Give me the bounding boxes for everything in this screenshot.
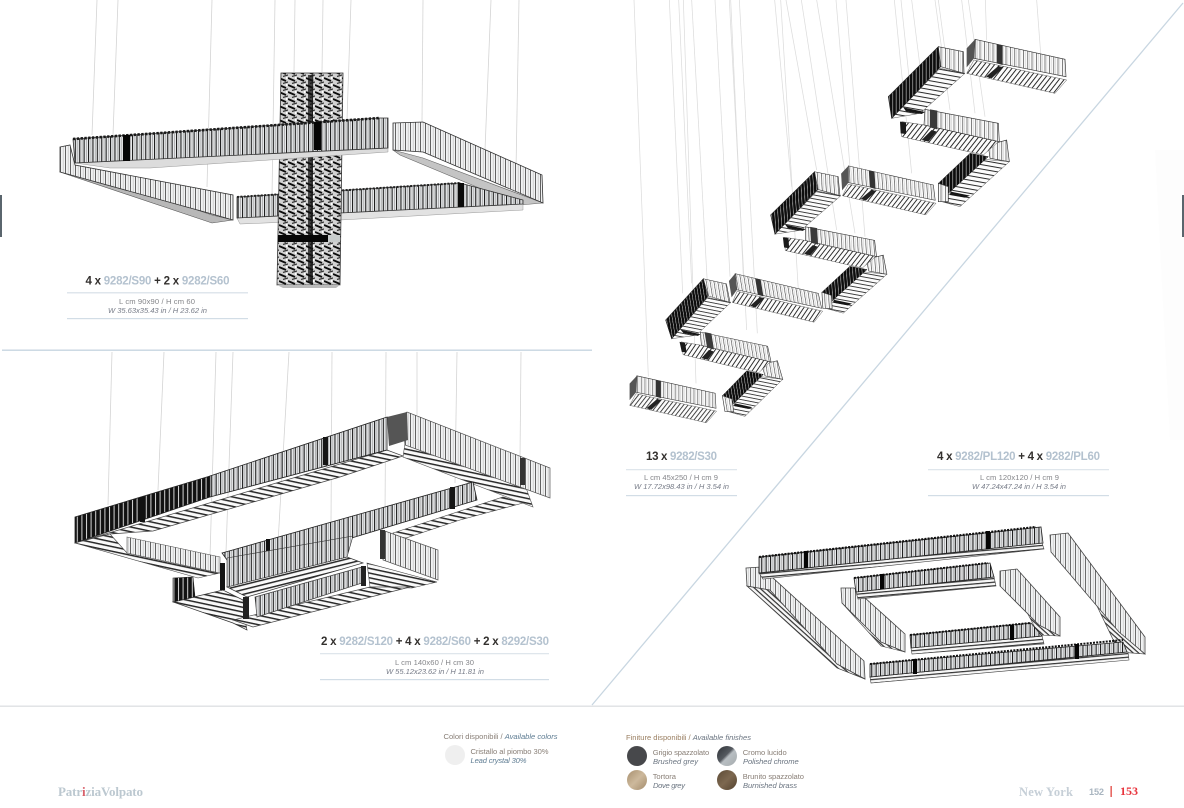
label: burnished brass: Burnished brass [743,781,797,790]
label: dove grey: Tortora [653,772,677,781]
caption: 4 x S90 + 2 x S60 [67,276,248,319]
right bar [393,122,543,205]
back bar [73,118,388,168]
model codes: 4 x 9282/S90 + 2 x 9282/S60 [86,276,230,288]
upper rectangle: right bar [387,412,550,507]
page number left: 152 [1089,787,1104,797]
footer rule [0,706,1184,707]
outer top bar [759,527,1044,579]
ceiling lamp: 4 x PL120 + 4 x PL60 [746,527,1145,683]
inner right bar [1000,569,1060,636]
caption: 2 x S120 + 4 x S60 + 2 x S30 [320,636,549,680]
page number separator [1110,786,1112,797]
middle group of bars [768,164,943,315]
left page mark [0,195,2,237]
upper rectangle: back bar [75,417,403,543]
label: lead crystal: Cristallo al piombo 30% [470,747,549,756]
model codes: 2 x 9282/S120 + 4 x 9282/S60 + 2 x 8292/S30 [321,636,549,648]
caption: 4 x PL120 + 4 x PL60 [928,451,1109,496]
left bar [60,145,233,223]
dimensions in inches: W 17.72x98.43 in / H 3.54 in [634,482,729,491]
label: brushed grey: Brushed grey [653,757,699,766]
swatch: polished chrome [717,746,737,766]
dimensions in cm: L cm 45x250 / H cm 9 [644,473,718,482]
lower rectangle [173,530,438,630]
caption: 13 x S30 [626,451,737,496]
dimensions in inches: W 35.63x35.43 in / H 23.62 in [108,306,207,315]
label: burnished brass [743,772,804,790]
diagonal divider [592,3,1183,705]
page number right: 153 [1120,784,1138,798]
inner left bar [841,588,905,652]
dimensions in cm: L cm 140x60 / H cm 30 [395,658,474,667]
suspension wires [92,0,519,197]
suspension wires [634,0,1041,383]
model codes: 13 x 9282/S30 [646,451,717,463]
legend heading: Colori disponibili / Available colors [444,732,558,741]
dimensions in cm: L cm 90x90 / H cm 60 [119,297,195,306]
model codes: 4 x 9282/PL120 + 4 x 9282/PL60 [937,451,1100,463]
swatch: burnished brass [717,770,737,790]
label: lead crystal: Lead crystal 30% [470,756,527,765]
outer right bar [1050,533,1145,654]
outer left bar [746,567,865,679]
dimensions in cm: L cm 120x120 / H cm 9 [980,473,1059,482]
faint backdrop of ceiling lamp photo [1155,150,1184,440]
label: dove grey: Dove grey [653,781,686,790]
horizontal divider between left photos [2,350,592,351]
upper group of bars [888,39,1067,207]
swatch: dove grey [627,770,647,790]
suspension wires [108,352,521,557]
upper rectangle: left short bar [75,534,220,578]
dimensions in inches: W 47.24x47.24 in / H 3.54 in [972,482,1066,491]
dimensions in inches: W 55.12x23.62 in / H 11.81 in [386,667,484,676]
label: brushed grey: Grigio spazzolato [653,748,709,757]
lower group of bars [658,271,840,420]
front bar [237,183,523,224]
vertical block [277,73,343,288]
label: dove grey [653,772,686,790]
brand logo: PatriziaVolpato [58,784,143,799]
label: burnished brass: Brunito spazzolato [743,772,804,781]
legend: available colors [444,732,558,765]
legend heading: Finiture disponibili / Available finishes [626,733,751,742]
chandelier: 4 x S90 + 2 x S60 [60,0,543,288]
upper rectangle: front bar [222,482,523,560]
swatch: lead crystal [445,745,465,765]
chandelier: 13 x S30 cascade [630,0,1067,423]
label: brushed grey [653,748,709,766]
label: lead crystal [470,747,549,765]
label: polished chrome: Cromo lucido [743,748,787,757]
label: polished chrome [743,748,799,766]
inner top bar [854,563,996,599]
label: polished chrome: Polished chrome [743,757,799,766]
outer bottom bar [870,640,1129,683]
right page mark [1182,195,1184,237]
collection name: New York [1019,785,1073,799]
legend: available finishes [626,733,804,790]
inner bottom bar [910,623,1044,654]
last bar [630,376,717,423]
chandelier: 2 x S120 + 4 x S60 + 2 x S30 [75,352,550,630]
swatch: brushed grey [627,746,647,766]
